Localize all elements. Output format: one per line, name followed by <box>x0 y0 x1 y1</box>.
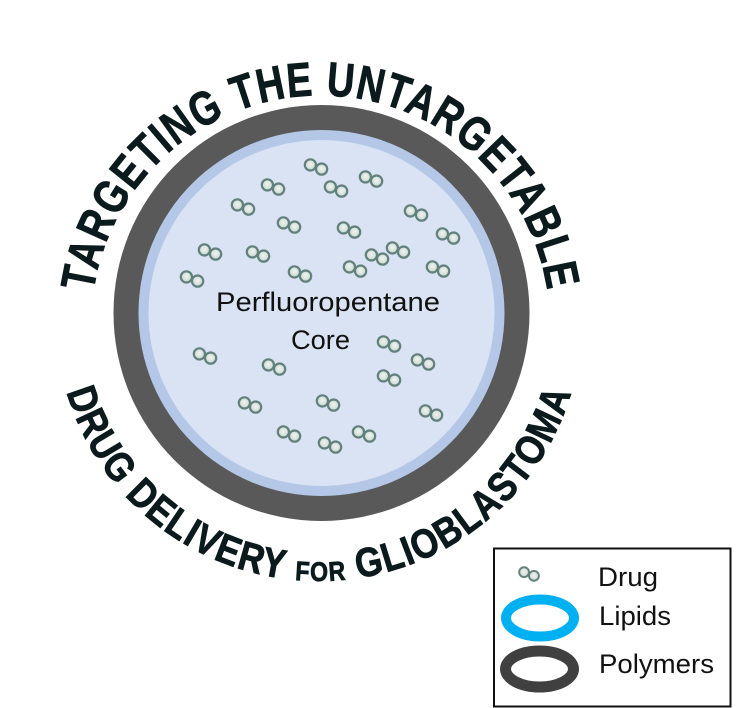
drug particles <box>181 159 459 453</box>
nanoparticle diagram <box>114 105 530 521</box>
legend: polymers: Polymers <box>599 649 714 679</box>
legend: drug <box>519 562 658 592</box>
legend box <box>494 548 730 706</box>
core label: Core <box>291 325 350 355</box>
perfluoropentane core <box>148 140 494 486</box>
legend <box>494 548 730 706</box>
subtitle: drug delivery for glioblastoma: DRUG DELIVERY FOR GLIOBLASTOMA <box>66 384 572 582</box>
title: targeting the untargetable: TARGETING THE UNTARGETABLE <box>60 62 580 290</box>
legend: lipids <box>506 600 671 636</box>
legend: drug: Drug <box>598 562 658 592</box>
polymer shell <box>114 105 530 521</box>
legend: polymers <box>506 649 714 687</box>
lipid layer <box>138 130 504 496</box>
legend: lipids: Lipids <box>599 601 671 631</box>
core label: Perfluoropentane <box>216 287 440 317</box>
